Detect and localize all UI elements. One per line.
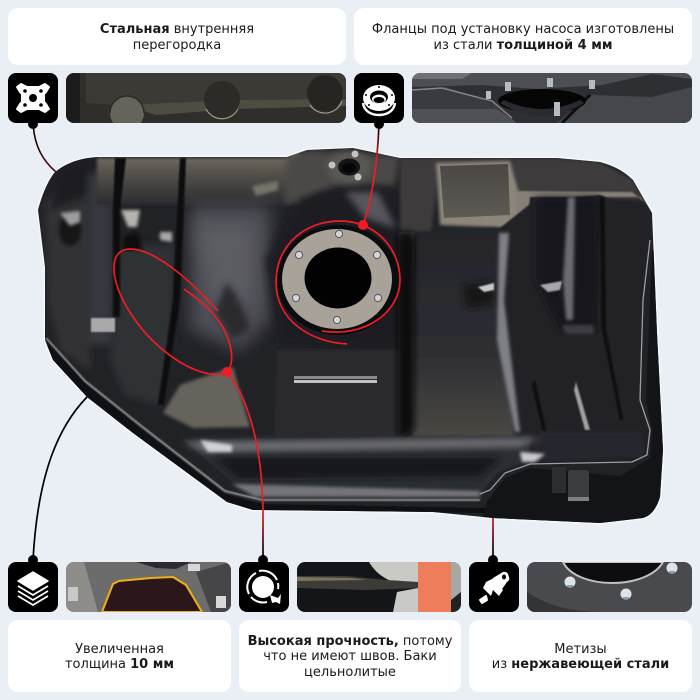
bottom bands (186, 437, 530, 492)
tank body (30, 140, 670, 530)
card: flanges: Фланцы под установку насоса изготовлены (372, 22, 674, 37)
callout: hardware line (492, 518, 494, 560)
card: steel partition: перегородка (133, 38, 221, 52)
photo: yellow outlined wall section (66, 562, 231, 612)
card: strength (239, 620, 461, 692)
pipes (552, 467, 566, 493)
card: thickness (8, 620, 231, 692)
centre right panel (494, 194, 610, 230)
brown floor patch (163, 367, 250, 428)
left side (45, 175, 90, 370)
callout: thickness line (33, 397, 87, 560)
card: hardware: Метизы (554, 642, 607, 656)
card: steel partition: Стальная внутренняя (100, 22, 254, 37)
card: strength: Высокая прочность, потому (248, 634, 452, 649)
card: strength: цельнолитые (304, 665, 396, 680)
photo: stainless bolts (527, 562, 692, 612)
tank photo with callout lines (28, 123, 664, 562)
top band (97, 152, 300, 205)
connector knobs (28, 119, 498, 565)
flange with bolts (277, 225, 399, 335)
photo: seamless edge with ruler (297, 562, 461, 612)
card: flanges (354, 8, 692, 65)
icon: bolt (469, 562, 519, 612)
dark ridges (113, 158, 126, 317)
icon: seamless tank (239, 562, 289, 612)
callout: strength ring and line (114, 249, 263, 560)
lower centre panel (275, 350, 400, 435)
tabs (59, 214, 81, 246)
right upper (400, 158, 645, 240)
icon: layers (8, 562, 58, 612)
photo: partition holes (66, 73, 346, 123)
filler area (262, 184, 370, 328)
lip (45, 335, 490, 513)
callout: steel partition line (33, 122, 56, 172)
photo: flange studs (412, 73, 692, 123)
card: steel partition (8, 8, 346, 65)
icon: flange (354, 73, 404, 123)
scratched bright zone (190, 205, 270, 350)
callout: flange ring and line (276, 122, 400, 344)
card: hardware: из нержавеющей стали (492, 657, 669, 672)
icon: steel plate (8, 73, 58, 123)
card: hardware (469, 620, 692, 692)
small neck (327, 151, 371, 183)
card: flanges: из стали толщиной 4 мм (434, 38, 612, 52)
card: strength: что не имеют швов. Баки (263, 649, 437, 664)
card: thickness: Увеличенная (75, 642, 164, 656)
card: thickness: толщина 10 мм (65, 657, 174, 672)
